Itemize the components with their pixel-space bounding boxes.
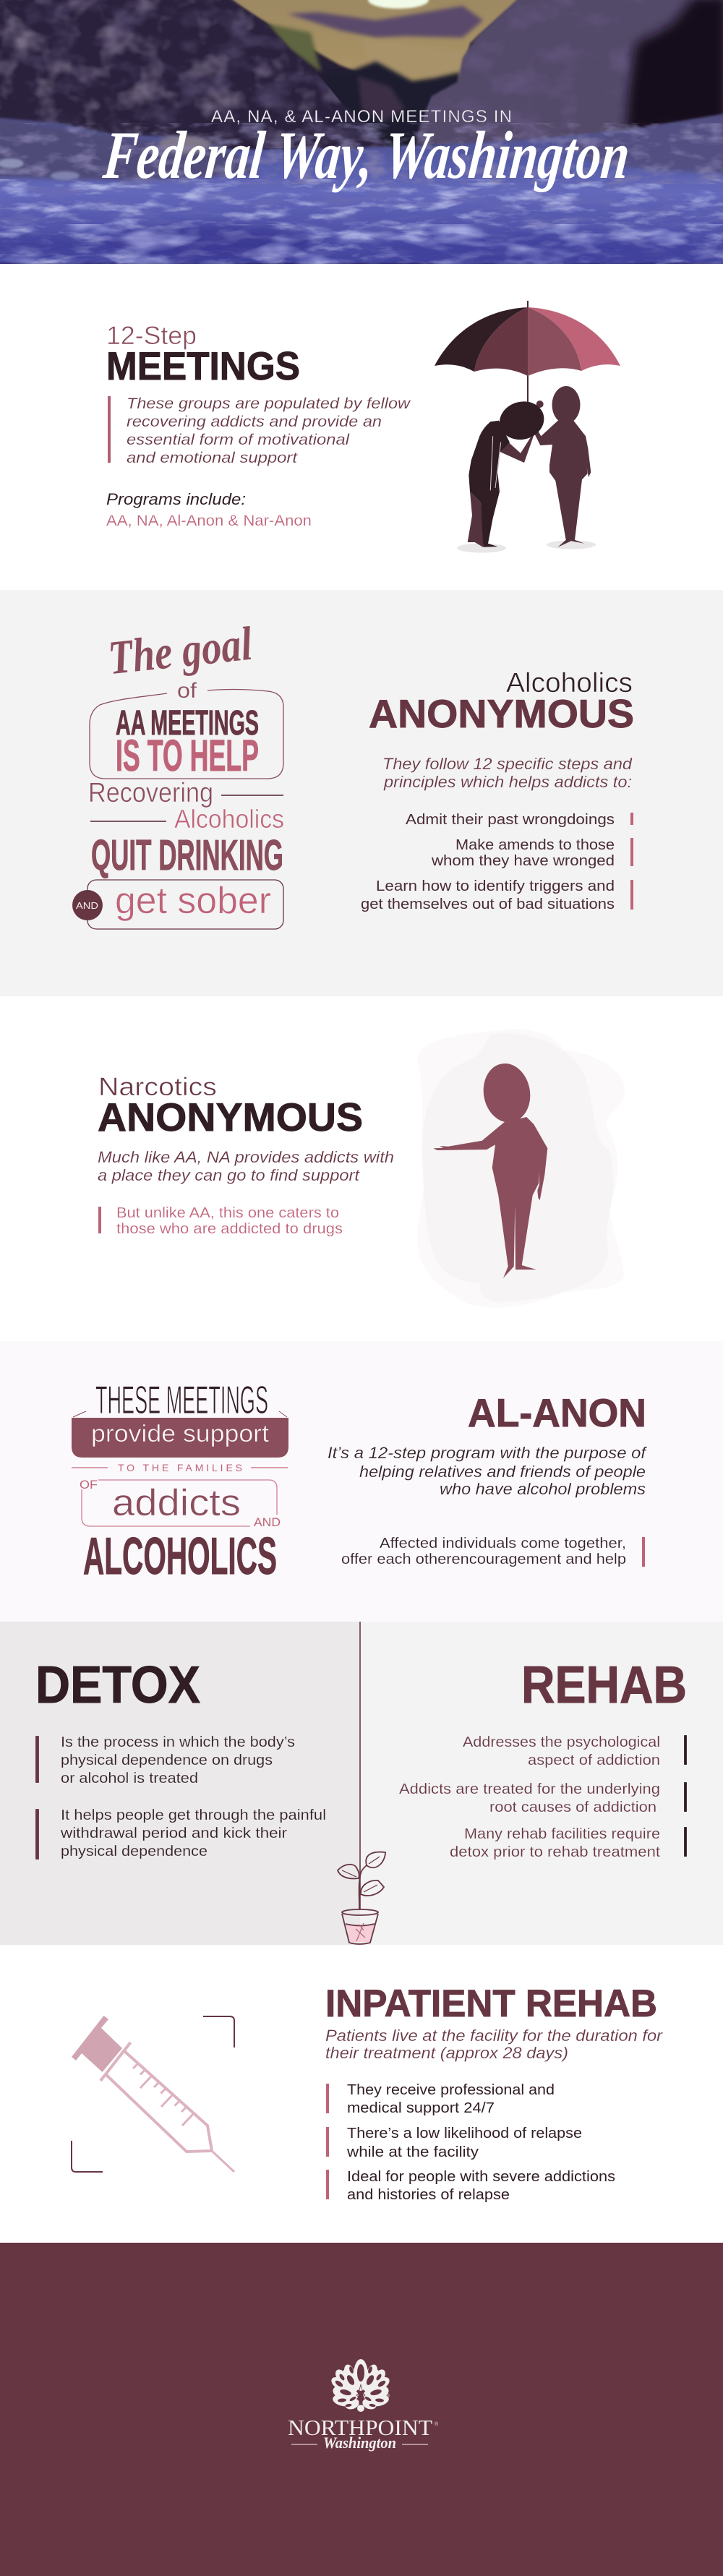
icon: syringe	[72, 2016, 234, 2172]
heading: inpatient rehab: INPATIENT REHAB	[325, 1982, 657, 2025]
typographic quote: the goal of AA meetings: of	[177, 679, 197, 703]
callout: affected individuals: Affected individuals come together,	[380, 1535, 626, 1552]
typographic quote: these meetings provide support	[72, 1377, 288, 1586]
typographic quote: these meetings provide support: addicts	[112, 1482, 241, 1524]
logo: Northpoint Washington	[288, 2359, 439, 2452]
typographic quote: the goal of AA meetings: AND	[76, 900, 98, 911]
typographic quote: the goal of AA meetings: Recovering	[88, 778, 213, 808]
description text: principles which helps addicts to:	[383, 773, 632, 791]
description text: who have alcohol problems	[440, 1480, 646, 1498]
heading: al-anon: AL-ANON	[468, 1390, 646, 1435]
typographic quote: these meetings provide support: OF	[80, 1478, 98, 1492]
list: inpatient points: They receive professional and	[347, 2081, 555, 2098]
panel: detox and rehab	[0, 1622, 723, 1945]
description text: a place they can go to find support	[98, 1166, 360, 1184]
list: what addicts learn: get themselves out of bad situations	[361, 896, 615, 912]
list: detox points: physical dependence	[61, 1843, 208, 1860]
list: rehab points: detox prior to rehab treatment	[450, 1844, 660, 1860]
typographic quote: these meetings provide support: AND	[254, 1515, 281, 1529]
wordmark: NORTHPOINT	[288, 2415, 432, 2440]
panel: alcoholics anonymous	[0, 590, 723, 996]
list: inpatient points: Ideal for people with severe addictions	[347, 2168, 615, 2185]
list: rehab points: Addicts are treated for the underlying	[399, 1781, 660, 1797]
panel: 12-step meetings	[0, 264, 723, 590]
typographic quote: the goal of AA meetings: AA MEETINGS	[116, 704, 259, 743]
list: detox points: Is the process in which the body’s	[61, 1734, 295, 1750]
heading: alcoholics anonymous	[369, 668, 634, 736]
description text	[325, 2027, 664, 2062]
typographic quote: the goal of AA meetings: QUIT DRINKING	[91, 831, 283, 879]
description text: recovering addicts and provide an	[127, 414, 382, 430]
header photo: mountain river	[0, 0, 723, 264]
description text	[328, 1444, 648, 1498]
list: rehab points: root causes of addiction	[489, 1799, 656, 1815]
heading: narcotics anonymous: Narcotics	[98, 1073, 217, 1101]
typographic quote: the goal of AA meetings: Alcoholics	[174, 804, 284, 834]
description text	[382, 755, 633, 791]
panel: narcotics anonymous	[0, 996, 723, 1341]
heading: 12-step meetings: MEETINGS	[106, 343, 300, 388]
list: detox points: It helps people get through the painful	[61, 1807, 326, 1823]
logo: Northpoint Washington: Washington	[323, 2434, 396, 2452]
header panel	[0, 0, 723, 264]
illustration: two people under umbrella	[435, 301, 620, 552]
description text	[98, 1148, 394, 1184]
list: inpatient points: and histories of relapse	[347, 2186, 510, 2203]
callout: but unlike AA: But unlike AA, this one caters to	[116, 1204, 339, 1221]
description text: Patients live at the facility for the duration for	[325, 2027, 664, 2045]
list: rehab points	[399, 1734, 687, 1860]
illustration: standing figure on soft blob	[418, 1029, 625, 1308]
panel: al-anon	[0, 1341, 723, 1622]
programs include: AA, NA, Al-Anon & Nar-Anon	[106, 513, 312, 529]
heading: 12-step meetings: 12-Step	[106, 322, 197, 350]
accent bar	[108, 396, 111, 463]
icon: peacock emblem	[329, 2359, 392, 2412]
heading: narcotics anonymous: ANONYMOUS	[98, 1095, 363, 1139]
typographic quote: these meetings provide support: ALCOHOLICS	[83, 1528, 277, 1586]
description text: It’s a 12-step program with the purpose of	[328, 1444, 648, 1462]
typographic quote: these meetings provide support: THESE MEETINGS	[95, 1377, 268, 1422]
list: inpatient points: while at the facility	[346, 2144, 479, 2160]
list: detox points: or alcohol is treated	[61, 1770, 198, 1786]
description text: Much like AA, NA provides addicts with	[98, 1148, 394, 1166]
list: rehab points: Many rehab facilities require	[464, 1826, 660, 1842]
description text	[127, 395, 411, 466]
typographic quote: these meetings provide support: provide support	[91, 1420, 269, 1447]
list: what addicts learn: Learn how to identify triggers and	[376, 878, 615, 894]
list: inpatient points: There’s a low likelihood of relapse	[347, 2125, 582, 2141]
list: inpatient points	[326, 2081, 615, 2203]
list: what addicts learn: Make amends to those	[455, 836, 615, 853]
panel: inpatient rehab	[0, 1945, 723, 2243]
heading: narcotics anonymous	[98, 1073, 363, 1139]
heading: alcoholics anonymous: Alcoholics	[506, 668, 633, 698]
callout: but unlike AA	[98, 1204, 343, 1237]
description text: essential form of motivational	[127, 432, 350, 448]
callout: affected individuals	[341, 1535, 645, 1567]
programs include: Programs include:	[106, 490, 246, 508]
heading: rehab: REHAB	[521, 1656, 687, 1714]
list: inpatient points: medical support 24/7	[347, 2100, 495, 2116]
description text: They follow 12 specific steps and	[382, 755, 633, 773]
programs include	[106, 490, 312, 529]
typographic quote: the goal of AA meetings: get sober	[115, 880, 271, 922]
list: detox points: withdrawal period and kick their	[60, 1825, 287, 1841]
list: detox points: physical dependence on drugs	[61, 1752, 273, 1768]
icon: potted plant	[338, 1852, 385, 1944]
heading: detox: DETOX	[35, 1656, 200, 1714]
description text: These groups are populated by fellow	[127, 395, 411, 412]
description text: their treatment (approx 28 days)	[325, 2044, 568, 2062]
panel: footer	[0, 2243, 723, 2576]
logo: Northpoint Washington: ®	[435, 2421, 439, 2427]
heading: alcoholics anonymous: ANONYMOUS	[369, 691, 634, 736]
callout: affected individuals: offer each otherencouragement and help	[341, 1551, 626, 1567]
icon: peacock emblem: ®	[386, 2393, 390, 2399]
header subtitle: AA, NA, & AL-ANON MEETINGS IN	[211, 107, 512, 127]
list: what addicts learn: whom they have wronged	[431, 852, 615, 869]
description text: helping relatives and friends of people	[359, 1463, 646, 1481]
list: rehab points: aspect of addiction	[528, 1752, 660, 1768]
typographic quote: the goal of AA meetings	[72, 617, 284, 929]
heading: 12-step meetings	[106, 322, 300, 388]
list: what addicts learn: Admit their past wrongdoings	[406, 811, 615, 828]
description text: and emotional support	[127, 450, 298, 466]
typographic quote: the goal of AA meetings: IS TO HELP	[116, 731, 259, 780]
callout: but unlike AA: those who are addicted to drugs	[116, 1220, 343, 1237]
list: rehab points: Addresses the psychological	[463, 1734, 660, 1750]
typographic quote: the goal of AA meetings: The goal	[106, 617, 255, 685]
typographic quote: these meetings provide support: TO THE FAMILIES	[118, 1462, 242, 1473]
list: detox points	[35, 1734, 326, 1860]
list: what addicts learn	[361, 811, 633, 912]
